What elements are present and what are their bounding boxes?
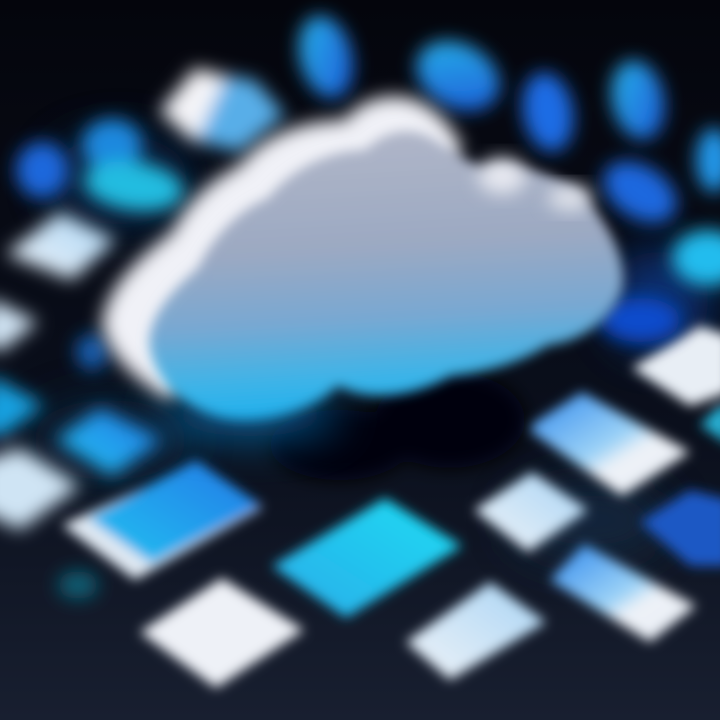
cloud highlight 1 [478,158,526,194]
tile: left upper [6,212,116,280]
left tiles [0,212,162,599]
droplet 10 [81,155,187,217]
upper-left tile [160,68,285,152]
bottom tiles [62,326,720,688]
tile: right mid blue white [526,392,690,496]
droplet 9 [82,119,142,171]
background glow [30,135,710,560]
cloud highlight 2 [548,185,592,211]
tile: left blue [0,375,44,438]
droplet 1 [291,10,361,104]
tile: large blue with white edge [62,464,262,580]
tile: right small cyan [700,405,720,445]
tile: white bottom [140,578,304,688]
tile: right white [632,326,720,406]
droplet 5 [696,128,720,192]
tile: white bottom right [406,582,546,680]
faint tile [58,571,98,599]
small glow by cloud [76,334,108,370]
cloud glow [160,393,340,437]
tile: lower blue [56,408,162,476]
tile: right stripe [550,544,696,642]
cloud shadow [270,298,680,480]
tile: left middle [0,298,38,352]
droplet 2 [404,27,512,125]
tile: mid right small [474,472,588,552]
cloud face [149,131,623,420]
droplet 3 [516,68,580,156]
droplet 4 [604,55,672,145]
tile: large cyan centre [272,498,462,618]
cloud white extrusion [102,96,462,400]
droplet 6 [592,149,688,235]
tile: right navy [640,490,720,566]
droplet 7 [672,230,720,286]
top droplets [16,10,720,286]
tile: left pale [0,448,80,530]
droplet 8 [16,142,68,198]
cloud [102,96,623,437]
